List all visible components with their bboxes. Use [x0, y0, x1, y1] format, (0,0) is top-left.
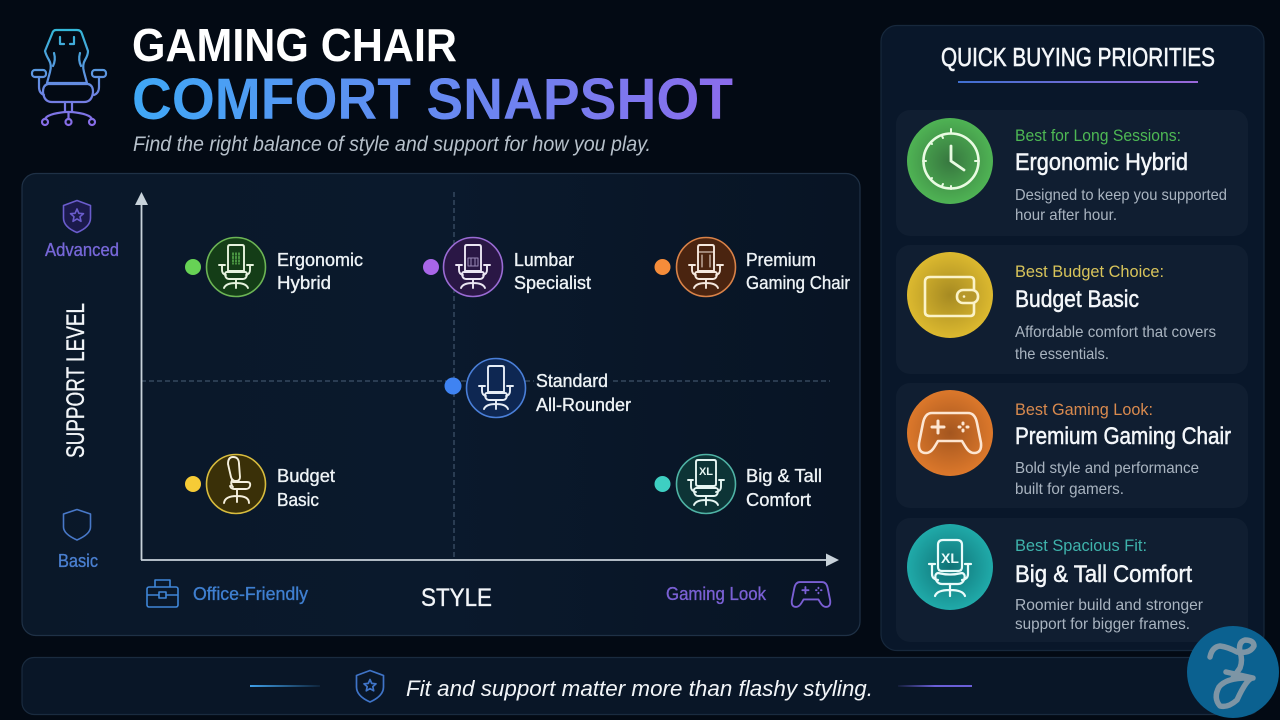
node: standard all-rounder: All-Rounder: [536, 395, 631, 415]
card: long sessions: Best for Long Sessions:: [1015, 126, 1181, 145]
icon: basic shield: [64, 510, 90, 540]
card: gaming look: [896, 383, 1248, 508]
card: spacious fit: Big & Tall Comfort: [1015, 561, 1192, 588]
node: lumbar specialist: Lumbar: [514, 250, 574, 270]
card: long sessions: [896, 110, 1248, 236]
node: standard all-rounder: Standard: [536, 371, 608, 391]
logo badge: [1187, 626, 1279, 718]
card: long sessions: Designed to keep you supported: [1015, 187, 1227, 204]
node: lumbar specialist: [423, 238, 591, 296]
card: spacious fit: XL: [941, 550, 959, 566]
card: gaming look: Bold style and performance: [1015, 460, 1199, 477]
node: premium gaming chair: [654, 238, 850, 296]
chart axes: [135, 192, 839, 566]
icon: advanced shield: [64, 200, 90, 232]
label: basic: Basic: [58, 551, 98, 571]
icon: wallet: [925, 277, 978, 316]
node: ergonomic hybrid: Hybrid: [277, 273, 331, 293]
footer message: Fit and support matter more than flashy styling.: [406, 676, 873, 701]
icon: gaming chair logo: [32, 30, 106, 125]
card: gaming look: built for gamers.: [1015, 481, 1124, 498]
node: premium gaming chair: Gaming Chair: [746, 273, 850, 293]
subtitle: Find the right balance of style and support for how you play.: [133, 133, 651, 156]
node: lumbar specialist: Specialist: [514, 273, 591, 293]
label: gaming look: Gaming Look: [666, 584, 767, 604]
card: spacious fit: Roomier build and stronger: [1015, 597, 1204, 614]
card: gaming look: Best Gaming Look:: [1015, 400, 1153, 419]
node: budget basic: Basic: [277, 490, 319, 510]
node: big and tall comfort: Big & Tall: [746, 466, 822, 486]
label: advanced: Advanced: [45, 240, 119, 260]
card: spacious fit: support for bigger frames.: [1015, 616, 1190, 633]
panel: quick buying priorities: [881, 26, 1264, 650]
icon: xl chair: [929, 540, 971, 596]
title: [132, 19, 733, 132]
panel: positioning chart: [22, 174, 860, 636]
x-axis title: STYLE: [421, 584, 492, 612]
heading underline: [958, 81, 1198, 83]
card: budget choice: [896, 245, 1248, 374]
card: budget choice: Best Budget Choice:: [1015, 262, 1164, 281]
icon: gamepad: [919, 413, 981, 453]
y-axis title: SUPPORT LEVEL: [62, 303, 90, 458]
node: big and tall comfort: XL: [699, 466, 713, 478]
icon: small gamepad: [792, 582, 830, 607]
node: budget basic: [185, 454, 335, 514]
card: gaming look: Premium Gaming Chair: [1015, 423, 1231, 450]
panel heading: QUICK BUYING PRIORITIES: [941, 42, 1215, 72]
card: spacious fit: Best Spacious Fit:: [1015, 536, 1147, 555]
node: ergonomic hybrid: Ergonomic: [277, 250, 363, 270]
card: budget choice: Affordable comfort that covers: [1015, 324, 1216, 341]
node: big and tall comfort: Comfort: [746, 490, 811, 510]
card: budget choice: Budget Basic: [1015, 286, 1139, 313]
icon: briefcase: [147, 580, 178, 607]
label: office-friendly: Office-Friendly: [193, 584, 308, 604]
icon: footer shield: [356, 670, 384, 702]
title: GAMING CHAIR: [132, 19, 457, 71]
card: spacious fit: [896, 518, 1248, 642]
card: long sessions: Ergonomic Hybrid: [1015, 149, 1188, 176]
node: premium gaming chair: Premium: [746, 250, 816, 270]
card: long sessions: hour after hour.: [1015, 207, 1117, 224]
title: COMFORT SNAPSHOT: [132, 67, 733, 132]
node: standard all-rounder: [444, 358, 631, 418]
card: budget choice: the essentials.: [1015, 346, 1109, 363]
node: big and tall comfort: [654, 454, 822, 514]
node: ergonomic hybrid: [185, 238, 363, 296]
footer banner: [22, 658, 1260, 714]
icon: clock: [923, 129, 979, 189]
node: budget basic: Budget: [277, 466, 335, 486]
